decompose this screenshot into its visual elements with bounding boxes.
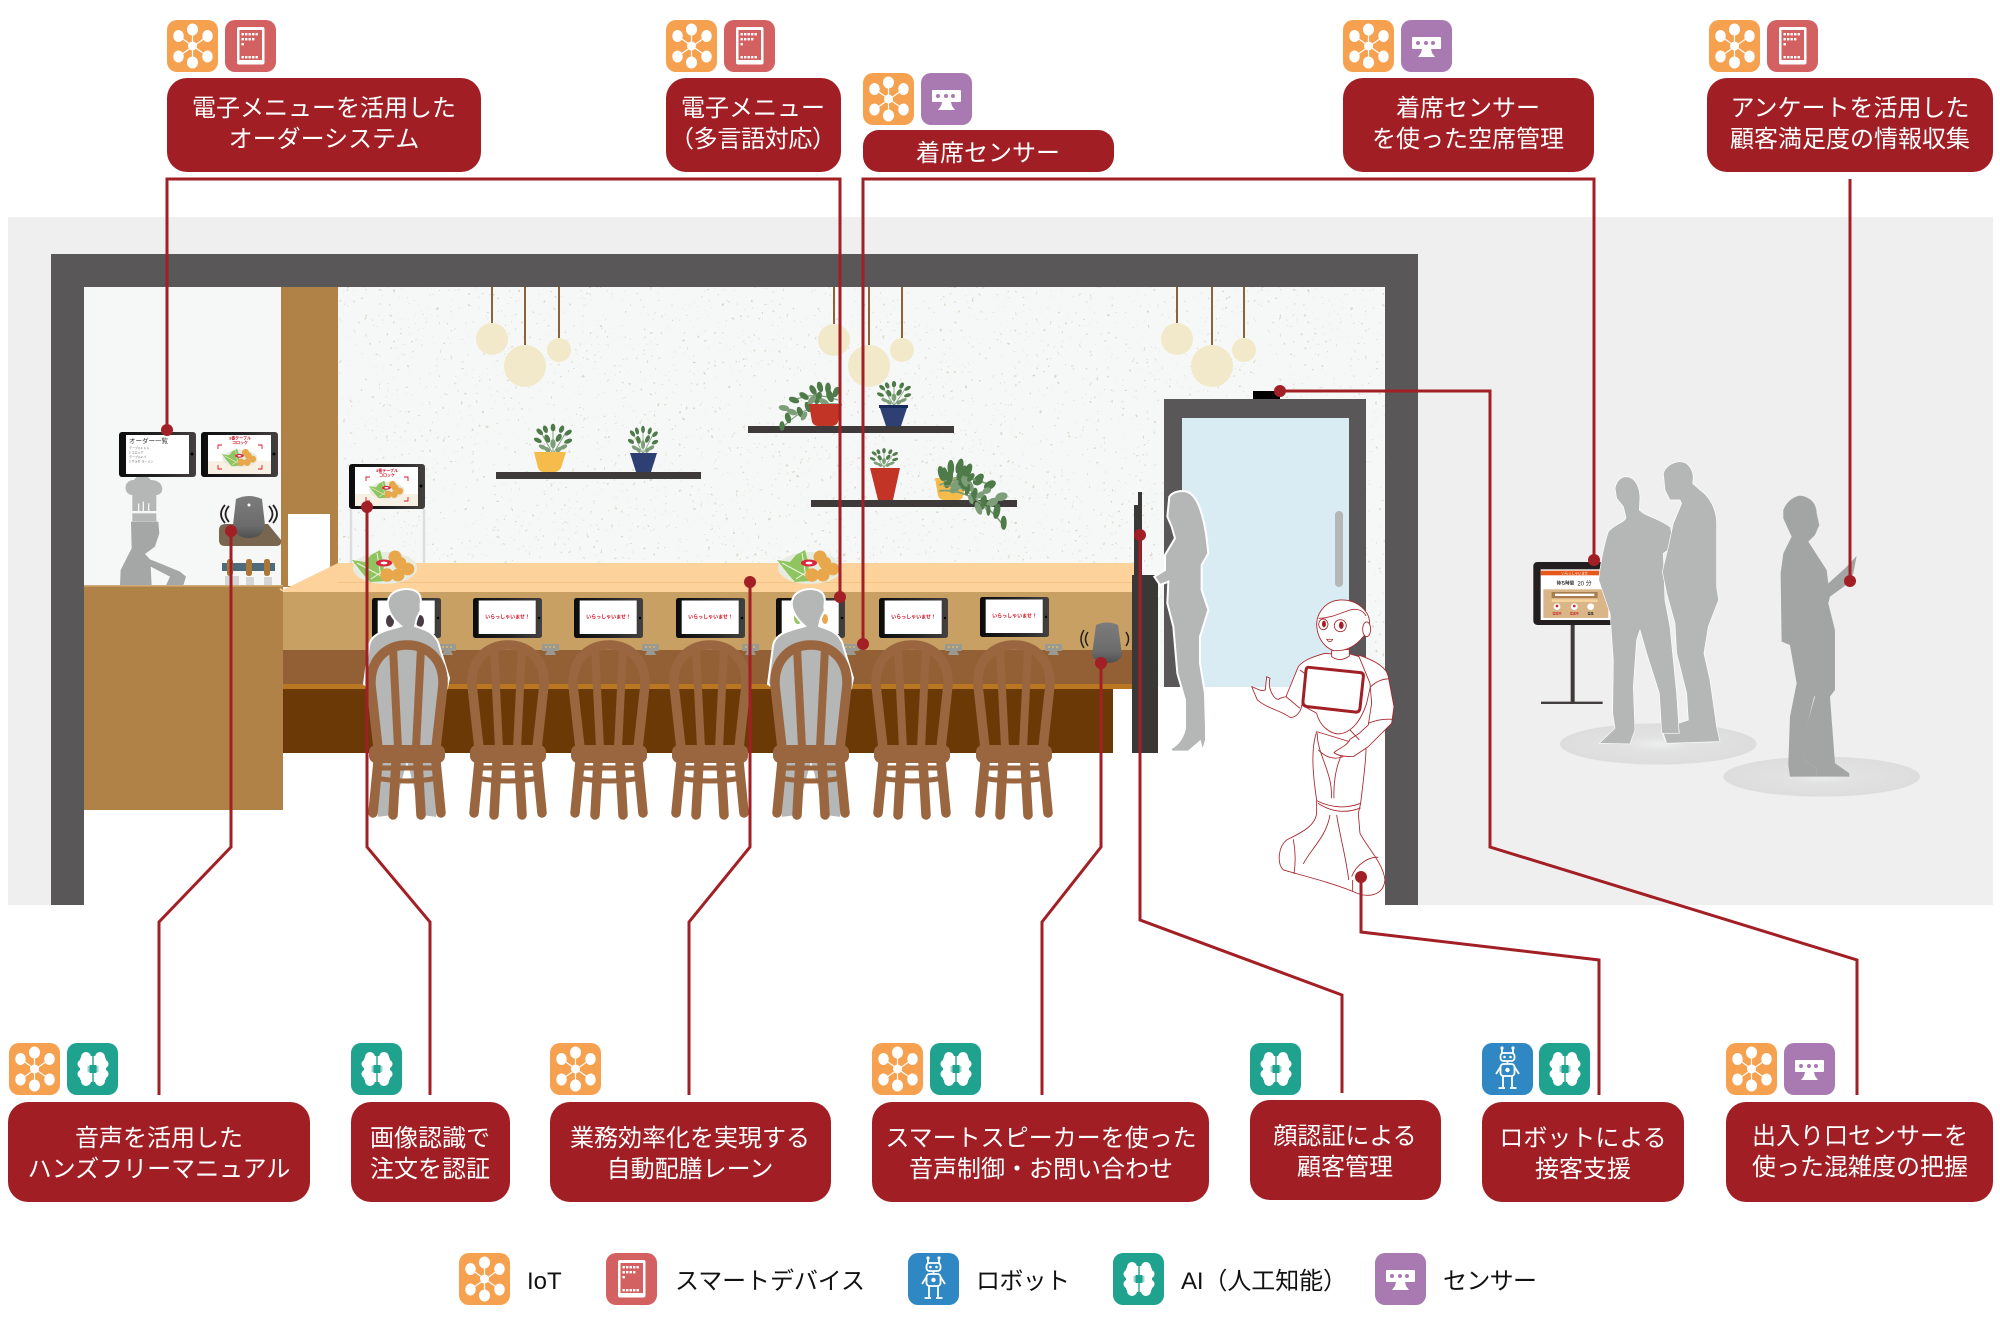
counter <box>280 563 1145 753</box>
seated customer 2 <box>768 589 853 818</box>
callout: 電子メニューを活用したオーダーシステム: オーダーシステム <box>229 126 419 153</box>
tablet: order list: 2 コロッケ <box>129 450 144 454</box>
counter tablets: いらっしゃいませ！ <box>891 614 936 620</box>
callout: 着席センサーを使った空席管理: を使った空席管理 <box>1372 126 1564 153</box>
tablet: order list <box>119 432 196 477</box>
connector dots <box>161 385 1856 883</box>
pendant lights left <box>476 287 571 387</box>
customer silhouette centre <box>1662 462 1720 743</box>
counter tablets: いらっしゃいませ！ <box>992 612 1037 620</box>
room interior <box>51 254 1418 905</box>
shelf with yellow and navy pots <box>496 424 701 479</box>
customer silhouette with smartphone <box>1781 496 1857 777</box>
tablet: order list: テーブル1 トト <box>129 445 149 450</box>
grey background band <box>8 217 1993 905</box>
callout: 顔認証による顧客管理 <box>1250 1043 1441 1200</box>
callout: ロボットによる接客支援: 接客支援 <box>1535 1156 1631 1183</box>
callout: 画像認識で注文を認証: 注文を認証 <box>370 1156 490 1183</box>
tablet: order list: オーダー一覧 <box>129 436 168 445</box>
counter tablets: いらっしゃいませ！ <box>688 614 733 620</box>
pendant lights right <box>1161 287 1256 387</box>
callout: 着席センサーを使った空席管理: 着席センサー <box>1396 95 1540 122</box>
callout: アンケートを活用した顧客満足度の情報収集 <box>1707 20 1993 172</box>
callout: 着席センサー: 着席センサー <box>916 140 1060 167</box>
callout: 電子メニューを活用したオーダーシステム: 電子メニューを活用した <box>192 95 456 122</box>
callout: 出入り口センサーを使った混雑度の把握 <box>1726 1043 1993 1202</box>
food plate on counter left <box>352 550 417 584</box>
callout: 画像認識で注文を認証 <box>351 1043 510 1202</box>
kiosk with waiting time screen <box>1533 562 1615 704</box>
room frame <box>51 254 1418 905</box>
callout: 電子メニュー（多言語対応） <box>666 20 841 172</box>
chef silhouette <box>120 475 186 585</box>
kitchen counter <box>84 585 283 810</box>
callout: 業務効率化を実現する自動配膳レーン <box>550 1043 831 1202</box>
legend: AI（人工知能） <box>1181 1268 1347 1295</box>
callout: 画像認識で注文を認証: 画像認識で <box>370 1125 490 1152</box>
callout: 業務効率化を実現する自動配膳レーン: 業務効率化を実現する <box>570 1125 810 1152</box>
tablet: order list: テーブル2 バ <box>129 454 146 459</box>
tablet: order list: 3 サラダ ラーメン <box>129 458 153 464</box>
counter tablets: いらっしゃいませ！ <box>586 614 631 620</box>
tablet: food photo: コロッケ <box>232 439 248 445</box>
seated customer 1 <box>364 589 449 818</box>
callout: 音声を活用したハンズフリーマニュアル: ハンズフリーマニュアル <box>28 1156 290 1183</box>
smart speaker on counter <box>1081 622 1128 663</box>
callout: 電子メニューを活用したオーダーシステム <box>167 20 481 172</box>
callout: 顔認証による顧客管理: 顔認証による <box>1273 1123 1417 1150</box>
connector lines <box>159 179 1857 1095</box>
callout: アンケートを活用した顧客満足度の情報収集: アンケートを活用した <box>1730 95 1970 122</box>
callout: 業務効率化を実現する自動配膳レーン: 自動配膳レーン <box>607 1156 773 1183</box>
callout: スマートスピーカーを使った音声制御・お問い合わせ: 音声制御・お問い合わせ <box>909 1156 1173 1183</box>
legend: IoT <box>527 1268 562 1295</box>
reception post with camera <box>1132 492 1158 753</box>
robot <box>1252 600 1394 895</box>
tablet stand with food photo: コロッケ <box>379 472 395 478</box>
smart speaker on kitchen stand <box>219 496 281 546</box>
upper shelf with red and navy pots <box>748 381 954 433</box>
kiosk with waiting time screen: 空席中 <box>1553 610 1561 615</box>
chairs <box>369 645 1052 815</box>
door <box>1164 391 1366 687</box>
callout: アンケートを活用した顧客満足度の情報収集: 顧客満足度の情報収集 <box>1730 126 1970 153</box>
callout: スマートスピーカーを使った音声制御・お問い合わせ <box>872 1043 1209 1202</box>
customer silhouette left <box>1599 477 1679 744</box>
callout: ロボットによる接客支援 <box>1482 1043 1684 1202</box>
food plate on counter centre <box>777 550 842 584</box>
kiosk with waiting time screen: いらっしゃいませ <box>1561 570 1589 575</box>
people shadows <box>1560 723 1920 797</box>
tablet: food photo: 3番テーブル <box>229 434 251 440</box>
callout: ロボットによる接客支援: ロボットによる <box>1499 1125 1667 1152</box>
callout: 着席センサーを使った空席管理 <box>1343 20 1594 172</box>
kiosk with waiting time screen: 20 分 <box>1577 579 1592 587</box>
callout: 音声を活用したハンズフリーマニュアル <box>8 1043 310 1202</box>
seat sensors <box>439 644 1062 655</box>
callout: スマートスピーカーを使った音声制御・お問い合わせ: スマートスピーカーを使った <box>885 1125 1197 1152</box>
legend: センサー <box>1443 1268 1537 1295</box>
legend: スマートデバイス <box>675 1268 865 1295</box>
lower shelf with red and yellow pots <box>811 448 1017 529</box>
callout: 電子メニュー（多言語対応）: 電子メニュー <box>681 95 825 122</box>
legend <box>459 1253 1537 1305</box>
kitchen utensil rail <box>222 559 275 585</box>
kiosk with waiting time screen: 待ち時間 <box>1557 580 1575 587</box>
tablet stand with food photo <box>349 464 425 565</box>
kiosk with waiting time screen: 空席中 <box>1570 610 1579 615</box>
woman silhouette at reception <box>1154 491 1208 752</box>
counter tablets <box>372 597 1049 638</box>
callout: 着席センサー <box>863 73 1114 172</box>
counter tablets: いらっしゃいませ！ <box>485 614 530 620</box>
callout: 音声を活用したハンズフリーマニュアル: 音声を活用した <box>75 1125 243 1152</box>
callout: 出入り口センサーを使った混雑度の把握: 出入り口センサーを <box>1752 1123 1968 1150</box>
callout: 出入り口センサーを使った混雑度の把握: 使った混雑度の把握 <box>1752 1154 1968 1181</box>
tablet: food photo <box>201 432 278 477</box>
pillar <box>281 287 338 587</box>
legend: ロボット <box>976 1268 1070 1295</box>
callout: 電子メニュー（多言語対応）: （多言語対応） <box>670 126 836 153</box>
kiosk with waiting time screen: 空席 <box>1588 611 1594 616</box>
pendant lights centre <box>818 287 914 387</box>
callout: 顔認証による顧客管理: 顧客管理 <box>1297 1154 1393 1181</box>
tablet stand with food photo: 3番テーブル <box>376 467 398 473</box>
